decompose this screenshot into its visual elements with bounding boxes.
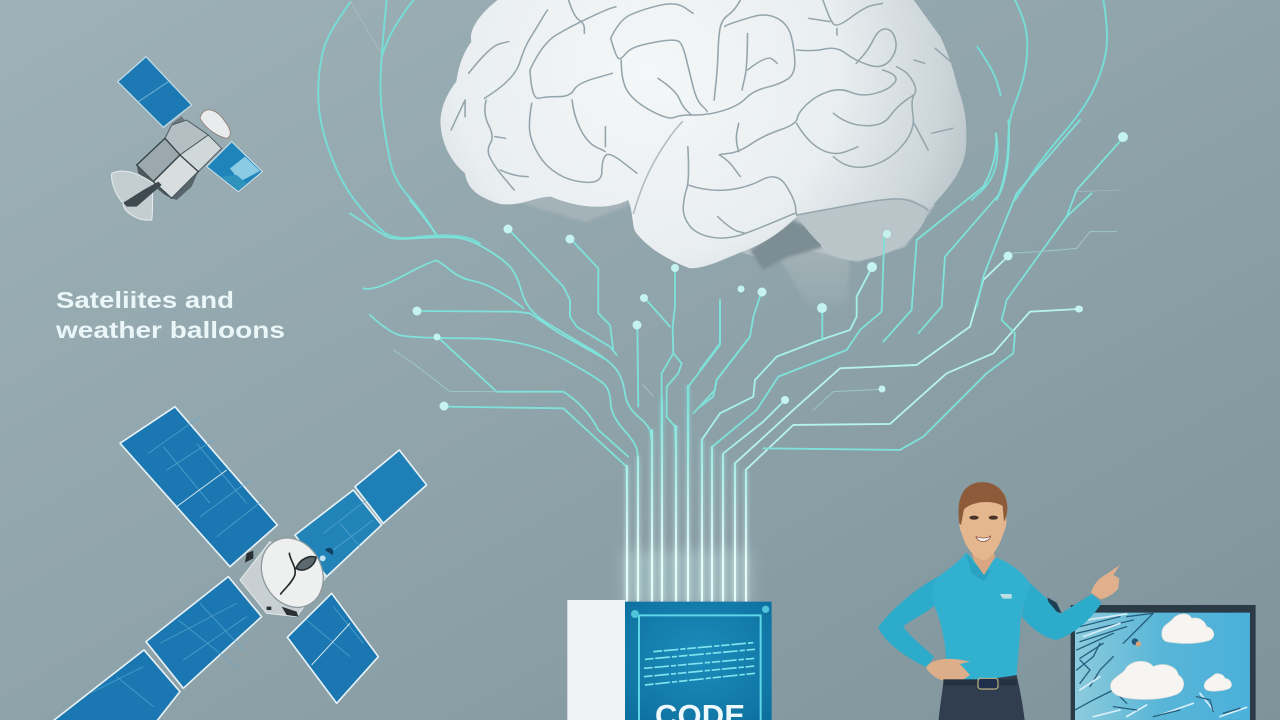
dish arm xyxy=(123,182,162,207)
presenter and weather screen xyxy=(878,482,1256,720)
label: satellites and weather balloons xyxy=(55,287,285,343)
belt buckle xyxy=(943,678,1017,689)
body lower xyxy=(137,138,180,182)
left circuit branches xyxy=(350,200,750,487)
right module xyxy=(200,110,230,138)
brain folds xyxy=(451,0,953,238)
dish xyxy=(250,527,335,618)
circuit end nodes xyxy=(412,132,1128,410)
code box xyxy=(567,600,772,720)
clouds on screen xyxy=(1111,614,1231,699)
brain stem xyxy=(765,245,850,318)
connector xyxy=(172,116,187,129)
cerebrum outline xyxy=(440,0,966,268)
panel grid lines xyxy=(90,417,373,707)
code text lines xyxy=(644,643,755,685)
map pin xyxy=(1132,638,1141,647)
presenter pants xyxy=(938,675,1025,720)
panel frame xyxy=(639,615,761,720)
pointing hand xyxy=(1091,565,1120,599)
right solar panel xyxy=(207,142,262,192)
cerebellum xyxy=(735,190,935,262)
vertical glowing bus xyxy=(627,386,746,601)
body details xyxy=(245,551,298,617)
lower brain shadow xyxy=(480,170,635,222)
brain xyxy=(440,0,966,318)
dish antenna mark xyxy=(281,553,316,594)
cerebellum lobe xyxy=(797,198,926,261)
label line 1: Sateliites and xyxy=(56,287,234,313)
screen surface xyxy=(1075,613,1250,720)
right circuit branches xyxy=(700,120,1123,470)
body base xyxy=(137,165,172,198)
circuit lines xyxy=(318,0,1123,605)
shirt body xyxy=(932,552,1031,679)
head xyxy=(959,498,1006,560)
map coast lines xyxy=(1075,613,1247,717)
panel dividers xyxy=(177,470,350,665)
dish feed xyxy=(320,548,333,561)
top solar panel xyxy=(118,57,192,127)
satellite body xyxy=(240,542,327,617)
dish xyxy=(112,171,153,220)
white box side xyxy=(567,600,626,720)
screen frame xyxy=(1071,605,1256,720)
label line 2: weather balloons xyxy=(55,317,285,343)
top circuit arcs left xyxy=(318,0,480,243)
body side xyxy=(180,135,222,172)
neck xyxy=(972,550,995,575)
collar xyxy=(966,552,992,582)
left hand on hip xyxy=(926,659,970,683)
arm patch xyxy=(1047,597,1062,613)
left arm on hip xyxy=(878,576,940,667)
body upper xyxy=(165,120,208,155)
right arm pointing xyxy=(1022,582,1102,640)
top circuit arcs right xyxy=(972,0,1107,200)
frame corner nodes xyxy=(631,606,769,618)
blue code panel xyxy=(625,602,772,720)
large satellite xyxy=(50,407,427,720)
weather screen xyxy=(1071,605,1256,720)
bus base glow xyxy=(622,550,752,605)
hair xyxy=(959,482,1007,525)
eyes xyxy=(969,516,998,520)
mouth xyxy=(976,536,991,542)
solar panels xyxy=(50,407,427,720)
presenter shirt and arms xyxy=(878,552,1102,679)
small satellite xyxy=(112,57,262,220)
dark fold shadow xyxy=(750,220,823,270)
shirt logo xyxy=(1000,594,1012,599)
